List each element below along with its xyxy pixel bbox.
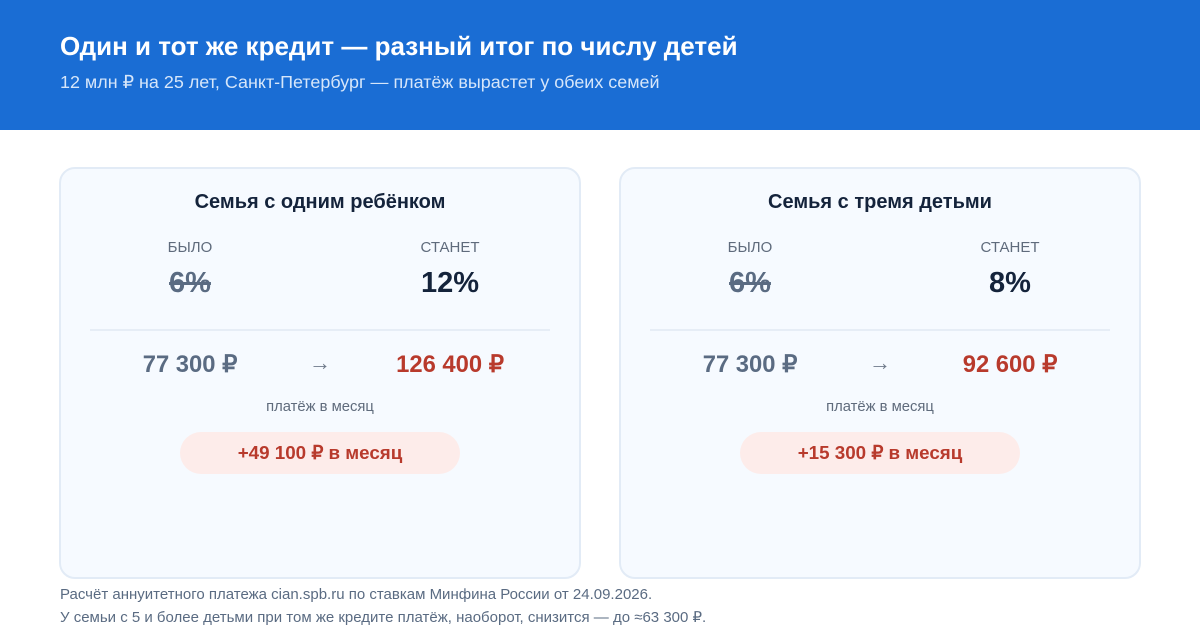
footnote: Расчёт аннуитетного платежа cian.spb.ru по ставкам Минфина России от 24.09.2026. bbox=[60, 586, 652, 603]
difference pill bbox=[740, 432, 1020, 474]
new rate: 12% bbox=[421, 267, 479, 299]
difference pill bbox=[180, 432, 460, 474]
label: after: СТАНЕТ bbox=[980, 239, 1040, 256]
old payment: 77 300 ₽ bbox=[703, 351, 797, 378]
arrow: → bbox=[869, 350, 891, 375]
old payment: 77 300 ₽ bbox=[143, 351, 237, 378]
panel: family with one child bbox=[59, 167, 581, 579]
label: after: СТАНЕТ bbox=[420, 239, 480, 256]
difference pill: +15 300 ₽ в месяц bbox=[798, 442, 962, 463]
label: before: БЫЛО bbox=[728, 239, 772, 256]
new payment: 92 600 ₽ bbox=[963, 351, 1057, 378]
old rate: 6% bbox=[169, 267, 211, 299]
old rate: 6% bbox=[729, 267, 771, 299]
panel: family with three children bbox=[619, 167, 1141, 579]
new payment: 126 400 ₽ bbox=[396, 351, 504, 378]
new rate: 8% bbox=[989, 267, 1031, 299]
label: before: БЫЛО bbox=[168, 239, 212, 256]
subtitle: 12 млн ₽ на 25 лет, Санкт-Петербург — платёж вырастет у обеих семей bbox=[60, 72, 660, 92]
panel heading: Семья с одним ребёнком bbox=[195, 191, 445, 213]
payment caption: платёж в месяц bbox=[266, 399, 374, 415]
arrow: → bbox=[309, 350, 331, 375]
footnote: У семьи с 5 и более детьми при том же кредите платёж, наоборот, снизится — до ≈63 300 ₽. bbox=[60, 609, 706, 626]
title: Один и тот же кредит — разный итог по числу детей bbox=[60, 31, 738, 61]
header band bbox=[0, 0, 1200, 130]
difference pill: +49 100 ₽ в месяц bbox=[238, 442, 402, 463]
panel heading: Семья с тремя детьми bbox=[768, 191, 992, 213]
footnote bbox=[60, 586, 706, 626]
payment caption: платёж в месяц bbox=[826, 399, 934, 415]
